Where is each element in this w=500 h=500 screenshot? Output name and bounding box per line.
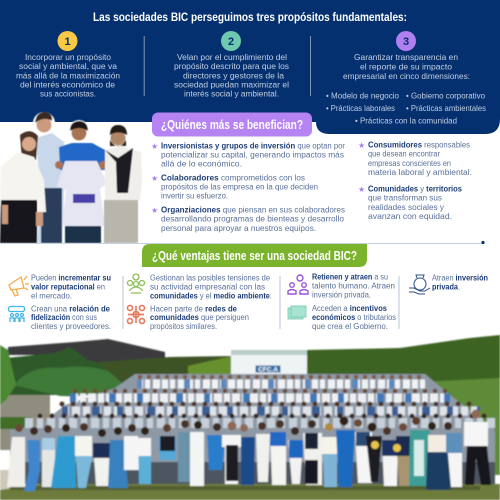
list: beneficiaries right: que transforman sus	[368, 194, 442, 202]
purpose 2: sociedad puedan maximizar el	[174, 80, 289, 90]
advantages column 3: talento humano. Atraen	[312, 282, 395, 290]
list: beneficiaries right: avanzan con equidad.	[368, 212, 452, 221]
banner: CFC.A	[231, 350, 307, 386]
title: Las sociedades BIC perseguimos tres propósitos fundamentales:	[93, 12, 407, 24]
garden background	[0, 335, 500, 500]
list: beneficiaries left: ★	[151, 174, 158, 183]
advantages column 3: que crea el Gobierno.	[312, 322, 388, 331]
photo: group of staff in garden	[0, 335, 500, 500]
banner: CFC.A: CFC.A	[258, 366, 278, 374]
icon: customers network	[8, 306, 24, 322]
advantages column 2: Gestionan las posibles tensiones de	[150, 274, 270, 282]
list: beneficiaries left: desarrollando programas de bienteas y desarrollo	[161, 214, 345, 224]
list: beneficiaries left	[151, 142, 345, 233]
list: beneficiaries left: propósitos de las empresa en la que deciden	[161, 182, 318, 192]
advantages column 3	[288, 272, 396, 331]
list: beneficiaries right: ★	[358, 141, 365, 150]
purpose 3: empresarial en cinco dimensiones:	[343, 72, 470, 81]
list: beneficiaries left: ★	[151, 206, 158, 215]
purpose 1: Incorporar un propósito	[25, 53, 112, 62]
heading: advantages	[142, 244, 367, 267]
list: beneficiaries right: que desean encontrar	[368, 150, 440, 158]
heading: who else benefits: ¿Quiénes más se benefician?	[161, 117, 303, 132]
crowd: back rows	[10, 374, 495, 484]
list: beneficiaries left: potencializar su capital, generando impactos más	[161, 150, 344, 160]
advantages column 3: Retienen y atraen a su	[312, 272, 388, 282]
heading: advantages: ¿Qué ventajas tiene ser una sociedad BIC?	[152, 248, 357, 263]
purpose 2: interés social y ambiental.	[184, 90, 279, 98]
purpose 3: Garantizar transparencia en	[354, 53, 458, 62]
purpose 1	[16, 31, 120, 98]
list: beneficiaries left: Organziaciones que piensan en sus colaboradores	[161, 206, 345, 214]
purpose 3: 3	[403, 36, 409, 48]
list: beneficiaries right: empresas conscientes en	[368, 159, 451, 168]
advantages column 1: Crean una relación de	[31, 304, 111, 314]
list: beneficiaries right: Consumidores responsables	[368, 140, 470, 150]
purpose 1: 1	[64, 36, 71, 48]
purpose 3: • Modelo de negocio	[326, 92, 400, 100]
advantages column 2: Hacen parte de redes de	[150, 304, 238, 314]
icon: money bag in hand	[409, 275, 430, 294]
purpose 2: directores y gestores de la	[183, 72, 285, 80]
advantages column 3: Acceden a incentivos	[312, 304, 388, 313]
purpose 3: el reporte de su impacto	[360, 62, 453, 72]
list: beneficiaries right: realidades sociales y	[368, 203, 444, 212]
purpose 2: propósito descrito para que los	[174, 62, 289, 71]
list: beneficiaries left: ★	[151, 142, 158, 151]
advantages column 2	[128, 274, 272, 331]
purpose 2	[174, 31, 289, 98]
list: beneficiaries left: invertir su esfuerzo.	[161, 192, 228, 200]
advantages column 1: el mercado.	[31, 292, 72, 300]
advantages column 2: propósitos similares.	[150, 322, 217, 331]
advantages column 4: Atraen inversión	[432, 274, 488, 282]
heading: who else benefits	[152, 112, 312, 136]
purpose 3: • Prácticas ambientales	[406, 104, 486, 113]
list: beneficiaries right	[358, 140, 472, 221]
purpose 3: • Prácticas laborales	[326, 104, 395, 113]
advantages column 1: valor reputacional en	[31, 282, 105, 292]
purpose 3: • Prácticas con la comunidad	[355, 116, 457, 126]
purpose 1: del interés económico de	[20, 80, 115, 90]
advantages column 3: económicos o tributarios	[312, 313, 396, 322]
advantages column 3: inversión privada.	[312, 290, 371, 300]
icon: banknotes	[288, 306, 306, 319]
advantages column 2: su actividad empresarial con las	[150, 282, 265, 292]
list: beneficiaries right: materia laboral y ambiental.	[368, 168, 472, 177]
photo: four people with t-shirt	[0, 112, 142, 243]
purpose 1: más allá de la maximización	[16, 72, 120, 80]
panel: three purposes	[0, 0, 500, 134]
purpose 2: 2	[228, 36, 234, 48]
advantages column 1: Pueden incrementar su	[31, 274, 111, 282]
list: beneficiaries right: ★	[358, 185, 365, 194]
list: beneficiaries left: allá de lo económico.	[161, 160, 242, 168]
list: beneficiaries right: Comunidades y territorios	[368, 184, 463, 194]
purpose 1: sus accionistas.	[40, 90, 96, 98]
advantages column 2: comunidades y el medio ambiente.	[150, 292, 272, 300]
icon: megaphone	[9, 276, 29, 296]
icon: community and environment	[128, 274, 144, 293]
list: beneficiaries left: Inversionistas y grupos de inversión que optan por	[161, 142, 345, 150]
advantages column 1: clientes y proveedores.	[31, 322, 111, 331]
advantages column 1	[8, 274, 111, 331]
icon: talent retention	[288, 275, 308, 294]
crowd: front row	[7, 410, 491, 491]
purpose 1: social y ambiental, que va	[19, 62, 118, 71]
list: beneficiaries left: Colaboradores comprometidos con los	[161, 174, 305, 182]
list: beneficiaries left: personal para aproyar a nuestros equipos.	[161, 224, 316, 233]
icon: community network	[128, 306, 144, 324]
purpose 2: Velan por el cumplimiento del	[177, 53, 287, 62]
advantages column 4: privada.	[432, 282, 460, 292]
purpose 3	[326, 31, 486, 126]
purpose 3: • Gobierno corporativo	[406, 92, 486, 100]
advantages column 2: comunidades que persiguen	[150, 313, 249, 322]
advantages column 1: fidelización con sus	[31, 313, 97, 322]
advantages column 4	[409, 274, 488, 294]
